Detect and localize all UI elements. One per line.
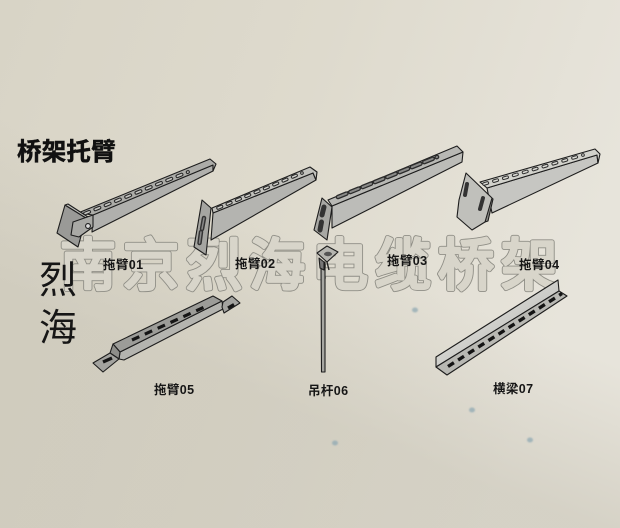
- title: 桥架托臂: [17, 138, 116, 166]
- label 04: 拖臂04: [519, 257, 560, 272]
- label 02: 拖臂02: [235, 256, 276, 271]
- watermark: 南京烈海电缆桥架: [60, 234, 564, 297]
- bracket 02: [194, 167, 317, 255]
- bracket 01: [57, 159, 216, 247]
- label 07: 横梁07: [493, 381, 534, 396]
- bracket 05: [93, 296, 240, 372]
- label 06: 吊杆06: [308, 383, 349, 398]
- hanger rod 06: [317, 246, 338, 372]
- label 03: 拖臂03: [387, 253, 428, 268]
- label 01: 拖臂01: [103, 257, 144, 272]
- watermark: 南京烈海电缆桥架: [60, 234, 564, 297]
- paper dimples: [332, 308, 533, 446]
- bracket 03: [314, 146, 463, 240]
- bracket 04: [457, 149, 600, 230]
- side character 烈: 烈: [39, 260, 77, 302]
- side character 海: 海: [39, 308, 77, 350]
- label 05: 拖臂05: [154, 382, 195, 397]
- cross beam 07: [436, 280, 567, 375]
